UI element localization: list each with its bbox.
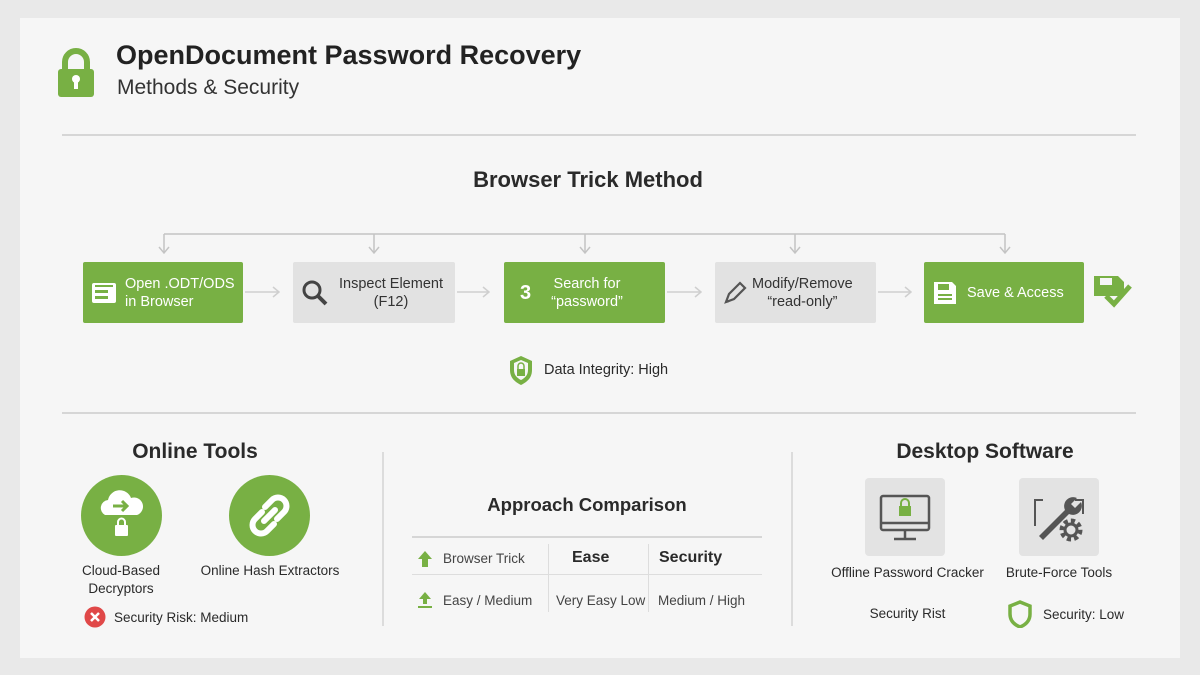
security low badge bbox=[1008, 600, 1124, 628]
icon: chain link bbox=[229, 475, 310, 556]
comparison table: Very Easy Low bbox=[556, 593, 645, 608]
step 3 bbox=[504, 262, 665, 323]
label: security rist: Security Rist bbox=[870, 606, 945, 621]
step 2 bbox=[293, 262, 455, 323]
security risk medium: Security Risk: Medium bbox=[114, 610, 248, 624]
step 5: Save & Access bbox=[967, 284, 1064, 300]
icon: save check bbox=[1094, 276, 1132, 308]
icon: wrench gear bbox=[1019, 478, 1099, 556]
icon: cloud decryptor bbox=[81, 475, 162, 556]
heading: approach comparison: Approach Comparison bbox=[487, 494, 687, 515]
step 4: “read-only” bbox=[767, 294, 837, 310]
panel: online tools bbox=[81, 440, 339, 628]
label: online hash extractors: Online Hash Extractors bbox=[201, 563, 339, 578]
comparison table: Easy / Medium bbox=[443, 593, 532, 608]
subtitle: Methods & Security bbox=[117, 76, 299, 99]
step 4: Modify/Remove bbox=[752, 276, 853, 292]
label: offline password cracker: Offline Password Cracker bbox=[831, 565, 984, 580]
panel: desktop software bbox=[831, 440, 1124, 628]
heading: online tools: Online Tools bbox=[132, 440, 258, 463]
step 3: “password” bbox=[551, 294, 623, 310]
panel: approach comparison bbox=[412, 494, 762, 612]
label: cloud-based decryptors: Decryptors bbox=[88, 581, 154, 596]
label: cloud-based decryptors bbox=[82, 563, 160, 596]
comparison table bbox=[412, 536, 762, 612]
step 5 bbox=[924, 262, 1084, 323]
step 2: (F12) bbox=[374, 294, 408, 310]
step 3: 3 bbox=[520, 282, 531, 304]
comparison table: Browser Trick bbox=[443, 551, 525, 566]
flow arrows bbox=[245, 286, 912, 298]
step 3: Search for bbox=[554, 276, 620, 292]
comparison table: Ease bbox=[572, 549, 609, 566]
security low badge: Security: Low bbox=[1043, 606, 1124, 622]
connector bracket bbox=[158, 233, 1010, 254]
step 1: in Browser bbox=[125, 294, 194, 310]
icon: header lock bbox=[58, 48, 94, 97]
label: cloud-based decryptors: Cloud-Based bbox=[82, 563, 160, 578]
icon: monitor lock bbox=[865, 478, 945, 556]
comparison table: Security bbox=[659, 549, 722, 566]
heading: desktop software: Desktop Software bbox=[896, 440, 1074, 463]
data integrity badge: Data Integrity: High bbox=[544, 362, 668, 378]
label: brute-force tools: Brute-Force Tools bbox=[1006, 565, 1112, 580]
title: OpenDocument Password Recovery bbox=[116, 40, 581, 70]
step 1: Open .ODT/ODS bbox=[125, 276, 235, 292]
comparison table: Medium / High bbox=[658, 593, 745, 608]
heading: browser trick: Browser Trick Method bbox=[473, 167, 703, 192]
security risk medium bbox=[84, 606, 248, 628]
step 1 bbox=[83, 262, 243, 323]
step 4 bbox=[715, 262, 876, 323]
step 2: Inspect Element bbox=[339, 276, 443, 292]
data integrity badge bbox=[510, 356, 668, 385]
